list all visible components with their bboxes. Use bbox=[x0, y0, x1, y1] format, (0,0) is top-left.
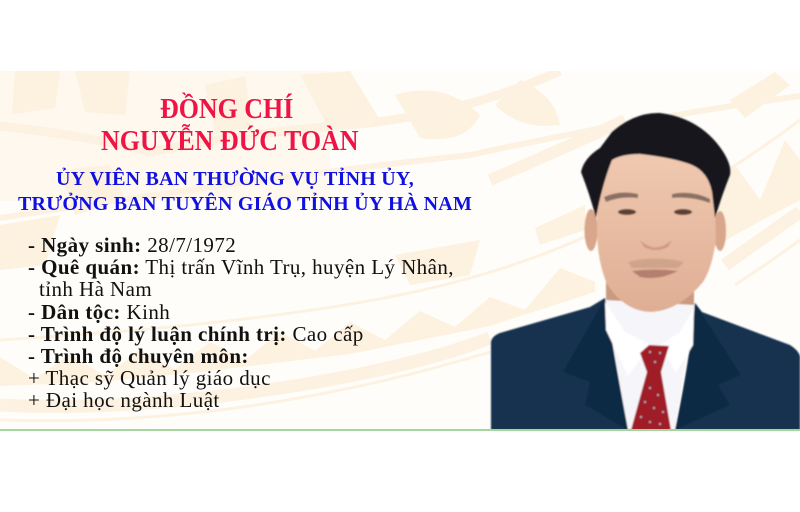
necktie bbox=[631, 345, 671, 430]
biography details: - Ngày sinh: 28/7/1972 bbox=[28, 233, 236, 257]
biography details: - Trình độ chuyên môn: bbox=[28, 344, 249, 368]
moustache shadow bbox=[628, 258, 684, 268]
title: name in red: NGUYỄN ĐỨC TOÀN bbox=[101, 126, 358, 157]
collar bbox=[605, 302, 651, 376]
background: pale bronze drum pattern bbox=[0, 71, 800, 422]
neck bbox=[606, 270, 694, 352]
mouth bbox=[632, 270, 678, 278]
face bbox=[597, 152, 716, 312]
biography details bbox=[28, 233, 454, 412]
biography details: + Thạc sỹ Quản lý giáo dục bbox=[28, 366, 271, 390]
eyebrows bbox=[604, 193, 638, 202]
biography details: - Trình độ lý luận chính trị: Cao cấp bbox=[28, 322, 364, 346]
shirt bbox=[605, 300, 694, 430]
biography details: - Dân tộc: Kinh bbox=[28, 300, 170, 324]
subtitle: position in blue bbox=[18, 168, 472, 215]
hair bbox=[581, 113, 730, 218]
nose bbox=[640, 240, 672, 250]
title: name in red: ĐỒNG CHÍ bbox=[160, 94, 293, 125]
suit jacket bbox=[491, 298, 628, 430]
eyes bbox=[618, 209, 636, 215]
bottom green rule bbox=[0, 429, 800, 431]
subtitle: position in blue: ỦY VIÊN BAN THƯỜNG VỤ TỈNH ỦY, bbox=[56, 168, 414, 190]
biography details: - Quê quán: Thị trấn Vĩnh Trụ, huyện Lý Nhân, bbox=[28, 255, 454, 279]
ears bbox=[584, 209, 598, 251]
biography details: + Đại học ngành Luật bbox=[28, 388, 220, 412]
title: name in red bbox=[101, 92, 358, 157]
subtitle: position in blue: TRƯỞNG BAN TUYÊN GIÁO TỈNH ỦY HÀ NAM bbox=[18, 193, 472, 215]
biography details: tỉnh Hà Nam bbox=[39, 277, 152, 301]
